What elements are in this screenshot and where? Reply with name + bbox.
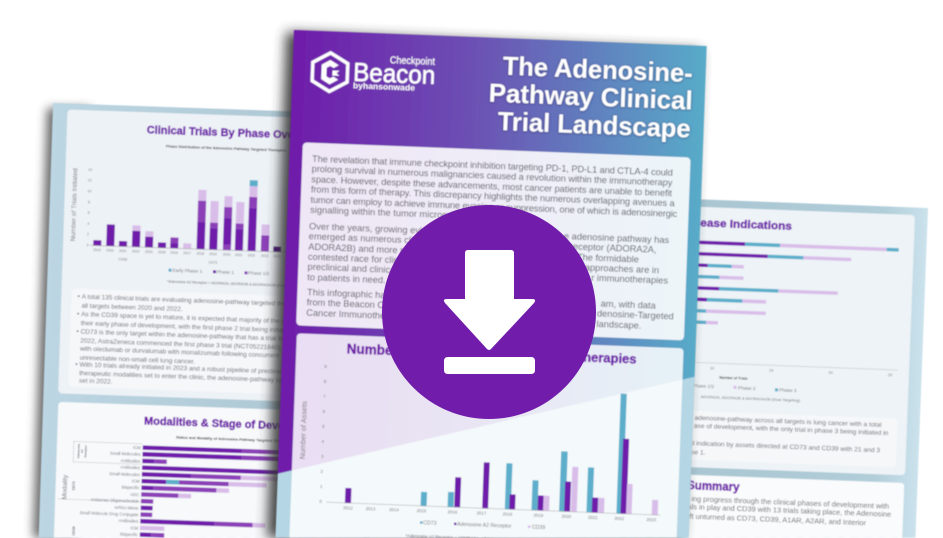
x-axis year labels: 2022	[614, 516, 625, 521]
panel: clinical trials by phase	[58, 110, 377, 404]
x-axis year labels: 2019	[93, 248, 101, 252]
modality labels: Antibodies	[121, 458, 140, 464]
y-axis ticks: 5	[322, 424, 325, 429]
panel: introduction text: Cancer Immunotherapy	[306, 308, 404, 321]
target group labels: Adenosine	[76, 443, 81, 459]
x-axis year labels: 2023	[261, 254, 269, 258]
callout: phase findings: CD73 is the only target within the adenosine-pathway that has a trial in phase 3. In	[80, 328, 317, 344]
chart footnote: ADORA2A, ADORA2B & ADORA2A/2B (Dual Targeting)	[701, 394, 801, 403]
x-axis year labels: 2012	[343, 505, 354, 511]
x-axis ticks and title: 20	[828, 371, 833, 375]
y-axis ticks: 10	[87, 189, 91, 193]
x-axis year labels: 2016	[448, 509, 458, 515]
callout: indication findings: adenosine-pathway across all targets is lung cancer with a total	[694, 415, 882, 429]
panel: introduction text: from the Beacon Checkpoint	[307, 297, 424, 312]
callout: phase findings: 2022, AstraZeneca commenced the first phase 3 trial (NCT05221840),	[80, 337, 282, 351]
y-axis ticks: 6	[323, 409, 326, 414]
x-axis year labels: 2014	[389, 507, 400, 512]
x-axis year labels: 2018	[197, 252, 204, 256]
x-axis year labels: 2020	[561, 514, 572, 519]
panel: introduction text: The revelation that immune checkpoint inhibition targeting PD-1, PD-L1 and CTLA-4 could	[312, 154, 673, 178]
x-axis year labels: 2021	[235, 253, 243, 257]
chart legend: Adenosine A2 Receptor	[457, 522, 512, 530]
heading: clinical trials by phase overview: Clinical Trials By Phase Overview	[147, 124, 323, 142]
page: disease indications and summary (right sheet)	[615, 197, 928, 538]
target group labels	[57, 441, 142, 538]
panel: introduction text: r immunotherapies	[591, 273, 669, 286]
chart legend: Phase 1	[216, 269, 234, 276]
modality labels: Antibodies	[120, 465, 140, 470]
panel: introduction text: signalling within the tumor microenvironment.	[310, 205, 496, 222]
y-axis ticks: 2	[320, 469, 324, 474]
x-axis year labels: 2019	[533, 513, 544, 518]
logo: Checkpoint Beacon by hansonwade	[312, 52, 436, 95]
modality labels: Bispecific	[120, 532, 138, 537]
modality labels: Small Molecule Drug Conjugate	[80, 510, 139, 517]
y-axis ticks: 7	[323, 394, 326, 399]
x-axis year labels: 2019	[209, 252, 217, 256]
x-axis ticks and title: 15	[769, 368, 773, 373]
summary text: als in play and CD39 with 13 trials taking place, the Adenosine	[687, 502, 891, 519]
callout: phase findings: their early phase of development, with the first phase 2 trial being initiated	[81, 320, 292, 335]
modality labels: ICM	[132, 478, 140, 484]
title: Pathway Clinical	[488, 78, 693, 116]
horizontal stacked bars: trials per indication	[662, 239, 902, 370]
panel: introduction text	[296, 142, 691, 340]
callout: phase findings: A total 135 clinical trials are evaluating adenosine-pathway targeted therapies across	[82, 293, 325, 309]
y-axis ticks: 2	[87, 232, 89, 237]
heading: summary: Summary	[687, 480, 740, 494]
panel: introduction text: approaches are in	[585, 262, 659, 275]
callout: phase findings: set in 2022.	[79, 378, 113, 386]
panel: introduction text: The formidable	[577, 252, 639, 264]
callout: phase findings: therapeutic modalities set to enter the clinic, the adenosine-pathway space	[79, 370, 294, 385]
chart legend: Early Phase 1	[172, 268, 203, 275]
y-axis ticks	[86, 168, 92, 247]
callout: phase findings: As the CD39 space is yet to mature, it is expected that majority of the trials are in	[81, 311, 314, 326]
modality labels: ICM	[133, 445, 141, 450]
chart legend: Phase 1/2	[248, 270, 270, 277]
callout: phase findings: all targets between 2020 and 2022.	[81, 302, 183, 313]
grouped bar chart: assets by year	[327, 382, 665, 515]
heading: number of adenosine-pathway therapies: Number	[346, 341, 399, 358]
x-axis year labels	[343, 505, 657, 522]
panel: introduction text: e adenosine pathway has	[564, 231, 670, 245]
x-axis ticks and title: Number of Trials	[719, 376, 748, 381]
callout: indication findings: ase of development, with the only trial in phase 3 being initiated in	[694, 423, 889, 437]
panel: disease indications	[618, 204, 915, 475]
y-axis ticks: 4	[322, 439, 325, 444]
panel: introduction text: receptor (ADORA2A,	[570, 241, 657, 255]
x-axis year labels: 2021	[588, 515, 598, 520]
shadow of left page	[33, 108, 90, 538]
x-axis ticks and title	[709, 366, 892, 386]
chart subtitle: Status and Modality of Adenosine-Pathway Targeted Therapies	[176, 434, 292, 444]
callout: indication findings	[628, 408, 898, 468]
target group labels: CD73	[72, 481, 76, 491]
y-axis ticks: 1	[320, 484, 323, 489]
panel: summary	[615, 472, 904, 538]
x-axis year labels: 2018	[502, 511, 513, 517]
chart legend: CD73	[423, 520, 437, 527]
modality labels: ICM	[130, 525, 139, 531]
callout: phase findings	[68, 288, 361, 397]
x-axis year labels: CD39	[118, 257, 127, 262]
target group labels: CD39	[72, 526, 76, 536]
callout: phase findings: •	[78, 293, 81, 300]
x-axis year labels: 2017	[183, 251, 191, 255]
panel: introduction text: tumor can employ to achieve immune evasion or suppression, one of which is adenosinergic	[310, 195, 678, 219]
panel: number of assets chart	[289, 333, 684, 538]
drop shadow of main page	[267, 32, 700, 538]
panel: introduction text: space. However, despite these advancements, most cancer patients are unable to benefit	[311, 174, 673, 198]
panel: introduction text: prolong survival in numerous malignancies caused a revolution within the immunotherapy	[312, 164, 673, 188]
x-axis year labels: 2023	[646, 517, 657, 522]
title	[487, 50, 694, 143]
summary text: ing progress through the clinical phases of development with	[691, 494, 889, 511]
modality labels: Bispecific	[122, 485, 139, 490]
panel: introduction text: emerged as numerous clinical	[309, 231, 432, 246]
x-axis year labels: 2017	[476, 510, 487, 516]
panel: introduction text: Over the years, growing evidence	[309, 221, 447, 236]
chart legend: Phase 1/2	[692, 383, 714, 390]
x-axis ticks and title: 25	[888, 373, 892, 377]
lower light band of the page background	[275, 361, 695, 538]
modality labels: Antibodies	[119, 518, 138, 524]
chart legend: CD39	[532, 525, 545, 531]
callout: phase findings: •	[75, 362, 78, 369]
x-axis year labels	[93, 248, 281, 267]
chart footnote: *Adenosine A2 Receptor = ADORA2A, ADORA2B & ADORA2A/2B (Dual Targeting)	[167, 280, 303, 289]
callout: phase findings: With 10 trials already initiated in 2023 and a robust pipeline of preclinical	[79, 362, 287, 376]
y-axis ticks: 9	[324, 364, 327, 369]
title: The Adenosine-	[502, 51, 693, 88]
panel: introduction text: am, with data	[600, 299, 657, 311]
page: main title sheet	[275, 30, 707, 538]
modality labels	[79, 443, 141, 537]
callout: phase findings: unresectable non-small cell lung cancer.	[80, 354, 195, 365]
y-axis ticks: 14	[88, 168, 92, 172]
callout: phase findings: with oleclumab or durvalumab with monalizumab following concurrent	[79, 346, 279, 360]
logo: Checkpoint Beacon by hansonwade: Checkpoint	[390, 55, 435, 68]
chart legend: Phase 3	[779, 387, 797, 394]
panel: introduction text: landscape.	[596, 319, 642, 331]
logo: Checkpoint Beacon by hansonwade: Beacon	[353, 57, 436, 90]
callout: phase findings: •	[76, 328, 80, 335]
callout: phase findings: •	[77, 311, 80, 318]
panel: modalities and stage of development	[54, 402, 368, 538]
stacked bar chart: trials by year and target	[90, 175, 291, 252]
chart legend	[692, 383, 797, 394]
modality labels: Small Molecules	[110, 451, 141, 457]
x-axis year labels: CD73	[208, 261, 217, 265]
panel: introduction text: contested race for clinical	[308, 252, 413, 266]
y-axis ticks: 4	[87, 222, 89, 226]
x-axis year labels: 2020	[223, 253, 231, 257]
y-axis ticks	[319, 364, 327, 504]
y-axis ticks: 8	[324, 379, 327, 384]
y-axis title: Number of Assets	[298, 401, 309, 459]
x-axis year labels: 2016	[170, 251, 178, 255]
heading: disease indications: Disease Indications	[682, 217, 792, 233]
panel: introduction text: preclinical and clinical	[307, 262, 398, 275]
y-axis ticks: 12	[88, 178, 92, 183]
y-axis title: modality: Modality	[61, 474, 69, 500]
target group labels: A2	[80, 449, 84, 453]
panel: number of assets chart: Therapies	[575, 349, 637, 367]
x-axis year labels: 2012	[273, 254, 281, 259]
modality labels: mRNA Mimic	[114, 505, 139, 511]
target group labels: Receptor	[83, 444, 88, 458]
title: Trial Landscape	[497, 106, 691, 143]
page: clinical trials by phase and modalities (left sheet)	[39, 103, 383, 538]
x-axis year labels: 2013	[366, 506, 376, 512]
modality labels: Antisense Oligonucleotide	[90, 497, 140, 504]
y-axis ticks: 3	[321, 454, 324, 459]
callout: indication findings: se 1.	[691, 449, 706, 457]
y-axis ticks: 8	[88, 200, 90, 204]
panel: introduction text: from this form of therapy. This discrepancy highlights the numerous overlapping avenues a	[311, 184, 676, 209]
chart legend	[168, 268, 270, 277]
x-axis year labels: 2020	[106, 248, 114, 253]
x-axis ticks and title: 10	[710, 366, 714, 370]
x-axis year labels: 2022	[248, 253, 255, 258]
panel: introduction text: denosine-Targeted	[597, 309, 674, 322]
x-axis year labels: 2021	[119, 249, 127, 253]
icon: download badge	[382, 205, 596, 419]
chart legend	[420, 520, 545, 531]
summary text: left unturned as CD73, CD39, A1AR, A2AR, and Interior	[684, 511, 867, 527]
chart legend: Phase 2	[738, 385, 756, 392]
y-axis ticks: 0	[87, 243, 89, 247]
x-axis year labels: 2023	[145, 250, 153, 254]
y-axis ticks: 0	[319, 499, 323, 504]
y-axis title: Number of Trials Initiated	[70, 168, 79, 241]
modality labels: ADC	[130, 492, 139, 497]
panel: introduction text: ADORA2B) and more recently	[308, 242, 433, 256]
logo: Checkpoint Beacon by hansonwade: byhansonwade	[353, 80, 415, 93]
x-axis year labels: 2015	[417, 508, 427, 514]
chart subtitle: Phase Distribution of the Adenosine-Pathway Targeted Therapies	[166, 144, 286, 153]
callout: indication findings: ed indication by assets directed at CD73 and CD39 with 21 and 3	[687, 440, 881, 454]
x-axis year labels: 2015	[158, 250, 166, 255]
panel: introduction text: to patients in need.	[307, 272, 386, 285]
modality labels: Small Molecules	[109, 471, 140, 477]
y-axis ticks: 6	[88, 211, 90, 215]
panel: introduction text: This infographic has	[307, 287, 391, 300]
heading: modalities and stage of development: Modalities & Stage of Development	[144, 415, 328, 434]
summary text	[684, 494, 892, 528]
x-axis year labels: 2022	[132, 249, 140, 254]
horizontal stacked bars: modality by phase	[140, 445, 302, 538]
